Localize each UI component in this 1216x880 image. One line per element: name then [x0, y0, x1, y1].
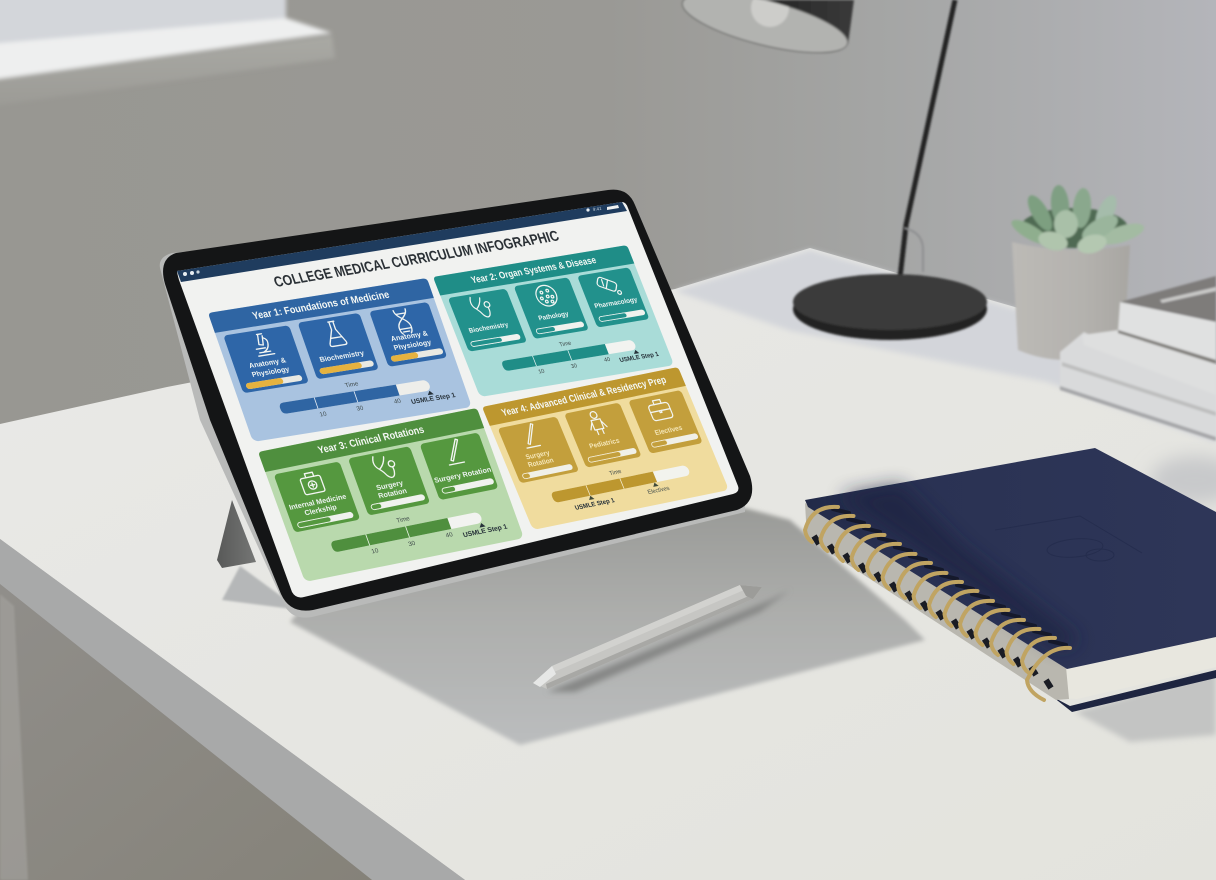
card: internal medicine clerkship: Clerkship — [303, 502, 338, 517]
embossed emblem — [995, 516, 1142, 561]
lamp hook — [904, 228, 923, 272]
card: biochemistry: Biochemistry — [468, 321, 510, 335]
notebook page block — [1060, 632, 1216, 699]
panel: year 3 clinical rotations — [258, 408, 524, 582]
wall background — [0, 0, 1216, 460]
lamp — [677, 0, 987, 340]
stack of books — [1060, 276, 1216, 441]
year 3 header — [258, 408, 484, 472]
card: pediatrics — [564, 403, 642, 468]
card: surgery rotation: Rotation — [377, 486, 408, 500]
panel: year 4 advanced clinical and residency prep — [482, 367, 729, 530]
shaded back of desk — [675, 250, 1216, 443]
status bar — [177, 202, 627, 282]
card: surgery rotation, second: Surgery Rotation — [433, 465, 492, 485]
notebook back shadow — [1150, 456, 1216, 504]
card: electives: Electives — [654, 425, 684, 437]
card: anatomy and physiology: Physiology — [250, 364, 291, 379]
space under desk — [0, 584, 372, 880]
card: surgery rotation — [498, 416, 579, 483]
timeline year 3: USMLE Step 1 — [462, 524, 509, 539]
spiral binding — [805, 507, 1070, 700]
timeline year 2: 30 — [570, 363, 578, 370]
timeline year 2: 10 — [538, 369, 546, 375]
stylus pen — [533, 585, 790, 692]
pot — [1012, 242, 1130, 360]
card: pathology — [514, 277, 589, 339]
notebook shadow — [1075, 672, 1216, 742]
plant pot and succulent — [1008, 184, 1146, 360]
card: pathology: Pathology — [537, 311, 570, 322]
spine shading — [840, 484, 1080, 650]
card: surgery rotation: Surgery — [375, 478, 404, 492]
card: surgery rotation, second — [420, 432, 499, 500]
year 4 header — [482, 367, 686, 426]
lamp shade — [681, 0, 855, 54]
card: pharmacology: Pharmacology — [593, 296, 639, 310]
timeline year 4: Electives — [647, 486, 671, 496]
timeline year 3: Time — [395, 515, 411, 525]
timeline year 1: 10 — [319, 411, 328, 418]
card: pediatrics: Pediatrics — [588, 437, 621, 450]
card: anatomy and physiology — [223, 325, 309, 393]
timeline year 4: Time — [609, 469, 623, 477]
timeline year 1: 40 — [393, 398, 403, 406]
card: anatomy and physiology, second — [369, 302, 447, 367]
card: biochemistry — [298, 313, 379, 379]
panel: year 3 clinical rotations: Year 3: Clinical Rotations — [317, 425, 426, 456]
timeline year 1: Time — [344, 380, 360, 389]
tablet bezel — [163, 190, 752, 611]
title: COLLEGE MEDICAL CURRICULUM INFOGRAPHIC — [272, 228, 561, 291]
lamp base — [793, 274, 987, 340]
timeline year 3: 40 — [445, 531, 454, 539]
timeline year 4 — [547, 456, 696, 515]
card: surgery rotation: Surgery — [525, 450, 551, 461]
card: anatomy and physiology: Anatomy & — [248, 355, 287, 370]
timeline year 2: Time — [559, 341, 573, 348]
panel: year 4 advanced clinical and residency prep: Year 4: Advanced Clinical & Residency Prep — [500, 375, 668, 419]
tablet aluminium edge — [160, 240, 745, 618]
card: anatomy and physiology, second: Anatomy & — [389, 329, 429, 343]
panel: year 2 organ systems and disease — [433, 245, 674, 397]
panel: year 2 organ systems and disease: Year 2: Organ Systems & Disease — [469, 254, 598, 285]
kickstand — [217, 500, 300, 610]
timeline year 1: USMLE Step 1 — [410, 392, 457, 406]
panel: year 1 foundations of medicine — [208, 278, 472, 442]
year 2 header — [433, 245, 634, 295]
card: electives — [628, 390, 703, 454]
timeline year 4: USMLE Step 1 — [574, 497, 616, 512]
notebook lower cover — [1053, 670, 1216, 712]
year 1 header — [208, 278, 434, 333]
timeline year 2: 40 — [603, 357, 612, 364]
card: anatomy and physiology, second: Physiology — [392, 338, 432, 352]
notebook cover — [805, 448, 1216, 669]
card: surgery rotation: Rotation — [527, 457, 555, 469]
timeline year 1 — [275, 366, 457, 426]
card: biochemistry — [448, 289, 527, 352]
card: biochemistry: Biochemistry — [318, 348, 365, 364]
tablet screen — [177, 202, 738, 597]
succulent — [1008, 184, 1146, 257]
tablet cast shadow — [290, 508, 925, 745]
desk top — [0, 248, 1216, 880]
timeline year 2 — [497, 328, 660, 383]
card: pharmacology — [577, 267, 649, 328]
card: internal medicine clerkship — [274, 461, 360, 533]
tablet — [160, 190, 752, 618]
status bar: 9:41 — [592, 206, 602, 212]
timeline year 2: USMLE Step 1 — [618, 351, 660, 364]
window and sill — [0, 0, 335, 106]
panel: year 1 foundations of medicine: Year 1: Foundations of Medicine — [251, 290, 391, 322]
notebook — [805, 448, 1216, 742]
table leg highlight — [0, 594, 28, 880]
timeline year 1: 30 — [356, 405, 365, 413]
card: internal medicine clerkship: Internal Medicine — [288, 492, 348, 512]
timeline year 3: 30 — [407, 540, 417, 548]
desk front edge — [0, 539, 465, 880]
card: surgery rotation — [348, 446, 430, 516]
spine pages between the rings — [805, 503, 1069, 700]
timeline year 3: 10 — [371, 547, 380, 555]
timeline year 3 — [326, 498, 509, 565]
lamp pole — [898, 0, 955, 295]
